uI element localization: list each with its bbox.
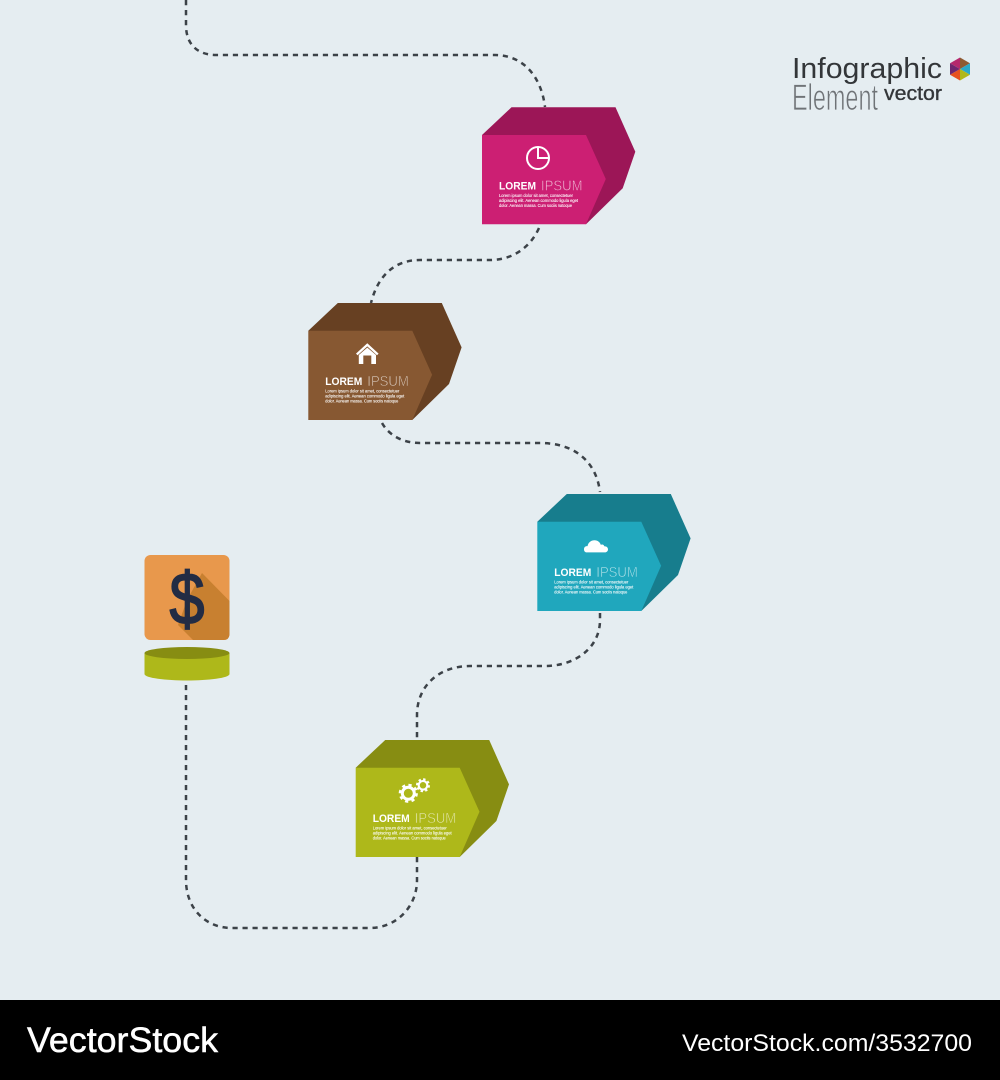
panel: brown box [308, 303, 462, 420]
brown body text [325, 388, 405, 404]
teal body text: dolor. Aenean massa. Cum sociis natoque [554, 590, 628, 595]
olive body text: Lorem ipsum dolor sit amet, consectetuer [373, 826, 447, 831]
dollar sign: $ [170, 559, 204, 640]
teal box front face [537, 522, 661, 611]
logo title: Infographic [792, 53, 942, 85]
pink body text: Lorem ipsum dolor sit amet, consectetuer [499, 193, 573, 198]
brown heading light: IPSUM [367, 373, 409, 390]
icon: pie chart [527, 147, 549, 169]
olive box back face [356, 740, 509, 857]
icon: dollar tile [144, 555, 230, 640]
olive body text [373, 826, 452, 840]
icon: gears [400, 779, 429, 802]
logo: Infographic Element vector [792, 53, 970, 118]
brown box back face [308, 303, 462, 420]
pink box front face [482, 135, 606, 224]
olive body text: dolor. Aenean massa. Cum sociis natoque [373, 836, 446, 841]
brown body text: adipiscing elit. Aenean commodo ligula eget [325, 394, 405, 398]
panel: olive box [356, 740, 509, 857]
panel: pink box [482, 107, 635, 224]
teal box back face [537, 494, 691, 611]
brown body text: Lorem ipsum dolor sit amet, consectetuer [325, 388, 400, 394]
dashed route path [186, 0, 600, 928]
olive box front face [356, 768, 480, 857]
icon: olive disc [144, 647, 230, 680]
teal body text: adipiscing elit. Aenean commodo ligula eget [554, 585, 634, 590]
brown box front face [308, 331, 432, 420]
teal body text [554, 580, 634, 594]
olive heading light: IPSUM [415, 810, 456, 827]
panel: teal box [537, 494, 691, 611]
icon: colour hexagon [950, 58, 970, 80]
logo word vector: vector [884, 83, 942, 105]
pink body text: adipiscing elit. Aenean commodo ligula eget [499, 198, 579, 203]
teal heading light: IPSUM [596, 564, 638, 581]
pink heading light: IPSUM [541, 177, 582, 194]
footer url: VectorStock.com/3532700 [682, 1030, 972, 1057]
logo subtitle: Element [792, 77, 878, 118]
pink heading: LOREM [499, 180, 536, 192]
pink body text: dolor. Aenean massa. Cum sociis natoque [499, 203, 572, 208]
brown body text: dolor. Aenean massa. Cum sociis natoque [325, 398, 399, 404]
icon: house [356, 343, 379, 364]
olive body text: adipiscing elit. Aenean commodo ligula eget [373, 831, 452, 836]
icon: cloud [584, 540, 608, 552]
pink body text [499, 193, 579, 208]
brown heading: LOREM [325, 376, 362, 388]
footer brand: VectorStock [27, 1021, 219, 1060]
footer bar [0, 1000, 1000, 1080]
pink box back face [482, 107, 635, 224]
teal body text: Lorem ipsum dolor sit amet, consectetuer [554, 580, 629, 585]
olive heading: LOREM [373, 813, 410, 825]
teal heading: LOREM [554, 567, 591, 579]
